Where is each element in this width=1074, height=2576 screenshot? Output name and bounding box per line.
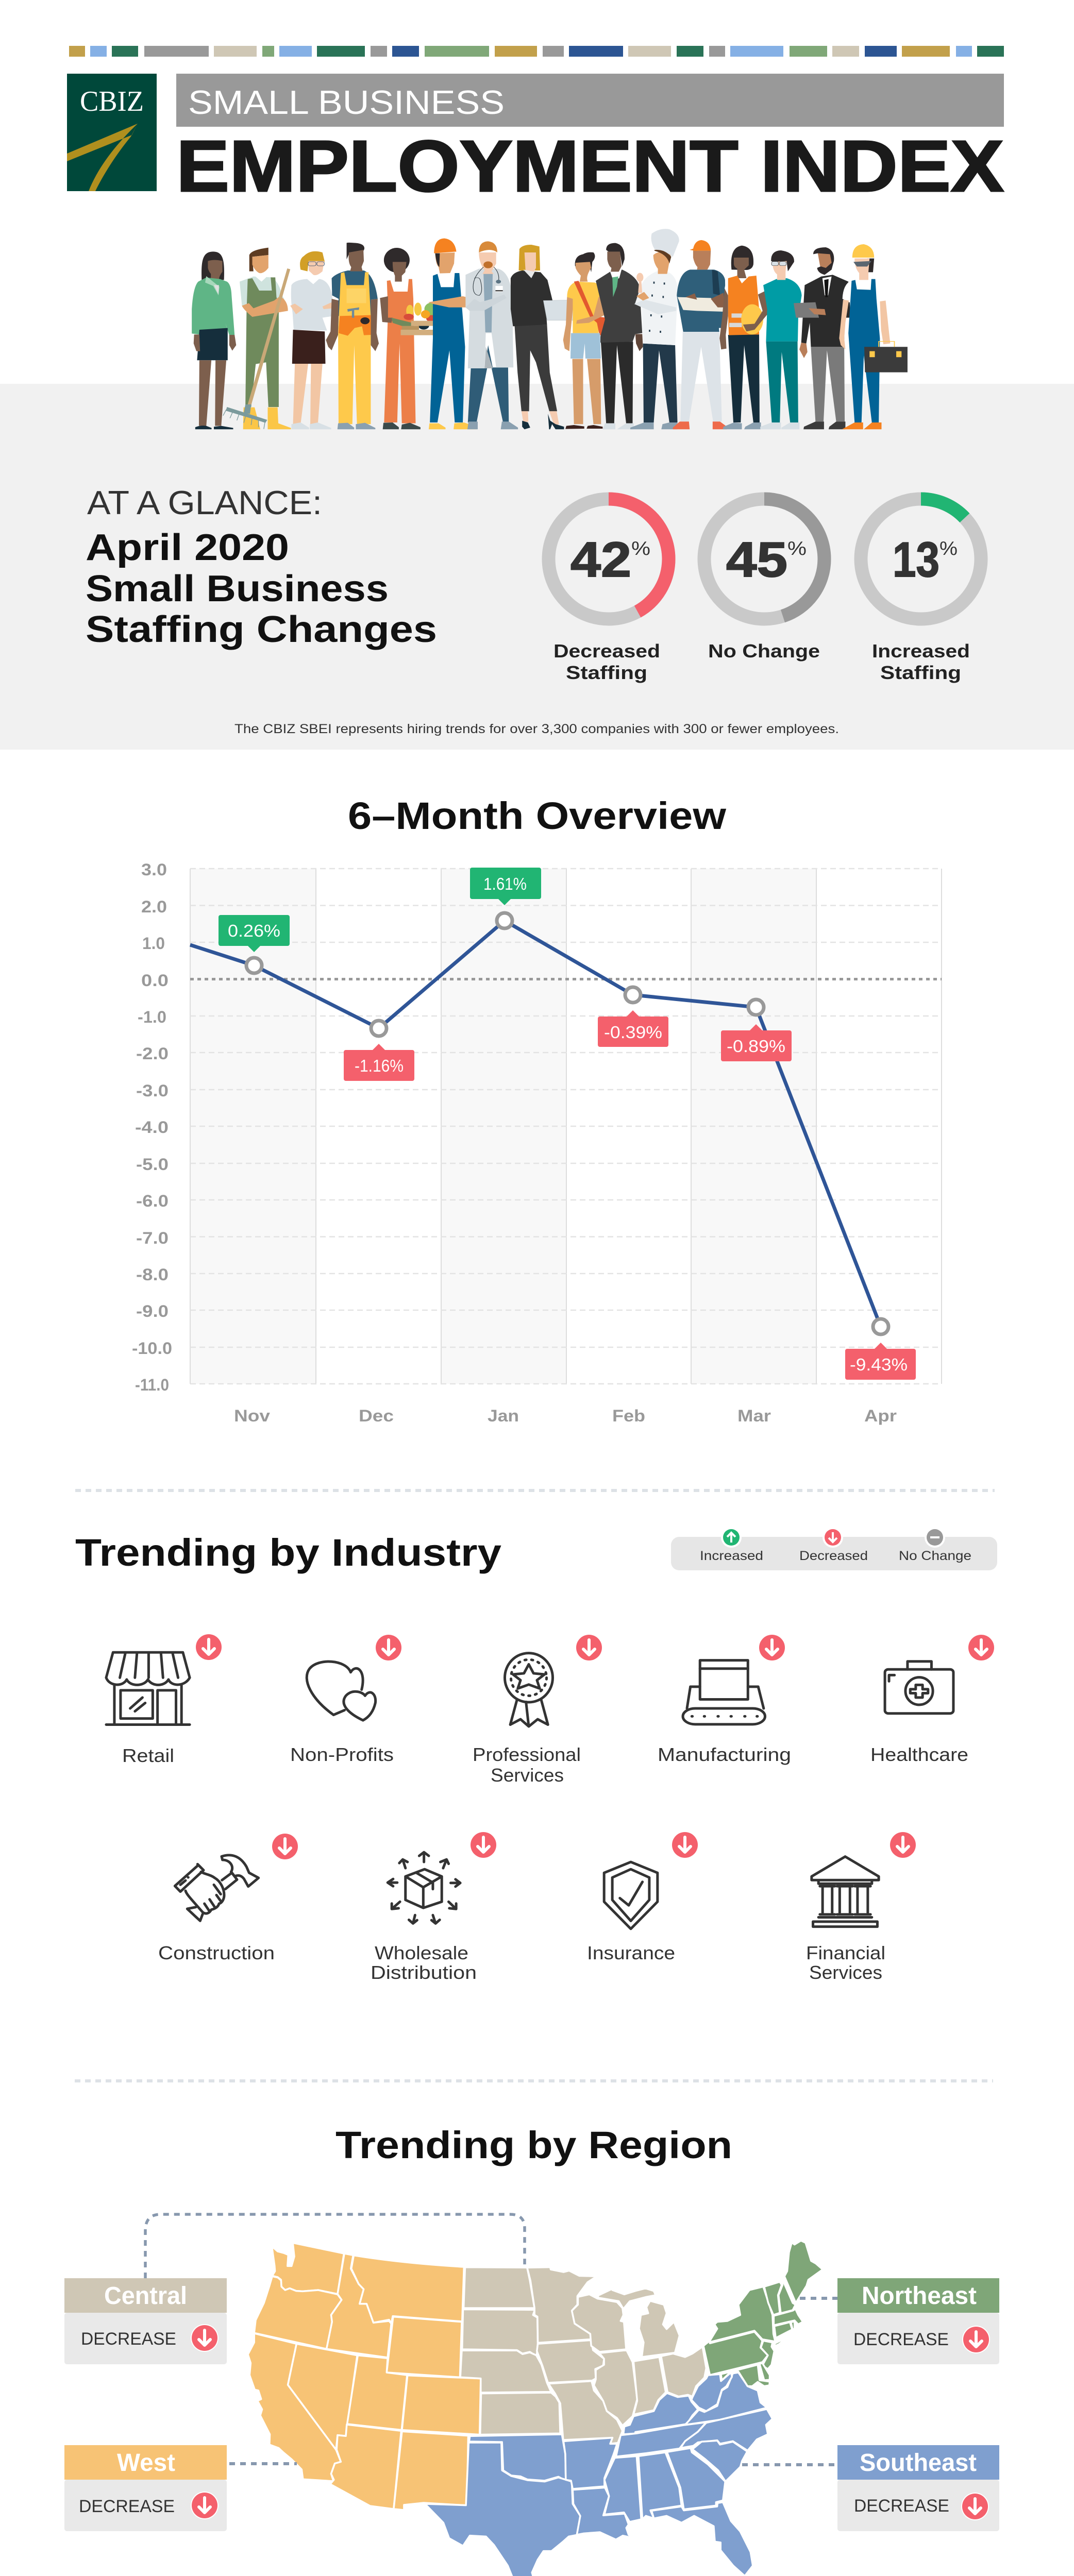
title: employment index: EMPLOYMENT INDEX: [176, 125, 1004, 207]
callout: Dec -1.16%: [344, 1044, 414, 1081]
series line: [190, 921, 881, 1327]
logo: CBIZ: CBIZ: [80, 86, 144, 117]
callout: Dec -1.16%: -1.16%: [355, 1056, 404, 1075]
man suit green tie: [596, 243, 643, 429]
industry: professional services: [473, 1635, 602, 1786]
callout: Feb -0.39%: -0.39%: [604, 1023, 662, 1042]
y axis labels: -4.0: [135, 1118, 169, 1137]
x axis labels: Apr: [864, 1406, 897, 1425]
callout: central: Central: [104, 2282, 187, 2310]
heading: trending by industry: Trending by Industry: [75, 1531, 501, 1574]
donut: 13% increased staffing: 13: [893, 532, 939, 587]
heading: at a glance: April 2020: [86, 527, 289, 568]
footnote: The CBIZ SBEI represents hiring trends for over 3,300 companies with 300 or fewer employees.: [234, 722, 839, 736]
donut: 42% decreased staffing: [548, 499, 669, 683]
top colour strip: [69, 46, 1004, 57]
industry: healthcare: [870, 1635, 994, 1765]
industry: insurance: Insurance: [587, 1942, 675, 1963]
x axis labels: Dec: [359, 1406, 394, 1425]
handyman yellow overalls: [326, 243, 379, 429]
callout: Nov 0.26%: 0.26%: [228, 921, 280, 940]
callout: Jan 1.61%: [470, 868, 541, 905]
donut: 42% decreased staffing: Staffing: [566, 662, 647, 683]
y axis labels: [132, 860, 172, 1394]
legend: Increased: [700, 1549, 763, 1563]
worker with toolbox: [839, 244, 908, 429]
callout: northeast: DECREASE: [853, 2330, 949, 2349]
x axis labels: Nov: [234, 1406, 270, 1425]
illustration: workers group: [192, 229, 908, 429]
industry: financial services: Services: [809, 1962, 882, 1983]
farmer woman orange: [380, 248, 447, 429]
heading: 6-month overview: 6–Month Overview: [348, 794, 726, 837]
west region states: [248, 2243, 481, 2510]
donut: 13% increased staffing: Increased: [872, 640, 970, 662]
donut: 42% decreased staffing: %: [631, 538, 650, 560]
callout: Feb -0.39%: [598, 1010, 668, 1047]
y axis labels: -5.0: [136, 1155, 169, 1174]
industry: financial services: Financial: [806, 1942, 885, 1963]
man blue shirt orange cap: [673, 240, 727, 429]
heading: at a glance: Staffing Changes: [86, 609, 437, 650]
heading: trending by region: Trending by Region: [335, 2124, 732, 2166]
callout: central: DECREASE: [81, 2329, 176, 2349]
industry: non-profits: Non-Profits: [290, 1744, 394, 1765]
industry: manufacturing: [658, 1635, 791, 1765]
donut: 13% increased staffing: Staffing: [880, 662, 961, 683]
donut: 13% increased staffing: [861, 499, 981, 683]
heading: at a glance: [86, 484, 437, 650]
callout: Mar -0.89%: [721, 1024, 792, 1061]
industry: retail: [106, 1634, 222, 1766]
y axis labels: -3.0: [136, 1081, 169, 1100]
industry: retail: Retail: [122, 1745, 174, 1766]
x axis labels: [234, 1406, 897, 1425]
legend: [671, 1527, 997, 1570]
industry: wholesale distribution: Distribution: [371, 1962, 477, 1983]
y axis labels: -11.0: [135, 1376, 169, 1394]
industry: professional services: Professional: [473, 1744, 581, 1765]
x axis labels: Mar: [737, 1406, 771, 1425]
bearded man suit with tablet: [794, 247, 851, 429]
industry: manufacturing: Manufacturing: [658, 1744, 791, 1765]
woman green: [192, 251, 236, 429]
doctor: [465, 241, 518, 429]
legend: Decreased: [799, 1549, 868, 1563]
heading: at a glance: AT A GLANCE:: [87, 484, 322, 521]
line chart: 6-month overview: [132, 860, 942, 1425]
connector: southeast: [742, 2463, 837, 2466]
y axis labels: -1.0: [138, 1008, 166, 1026]
industry: healthcare: Healthcare: [870, 1744, 968, 1765]
callout: west: West: [117, 2449, 175, 2477]
donut: 13% increased staffing: %: [939, 538, 958, 560]
y axis labels: -10.0: [132, 1339, 172, 1358]
connector: northeast: [800, 2297, 837, 2300]
y axis labels: -2.0: [136, 1044, 169, 1063]
donut: 45% no change: 45: [726, 532, 787, 587]
woman with glasses: [290, 251, 333, 429]
y axis labels: 2.0: [141, 897, 167, 916]
legend: No Change: [899, 1549, 971, 1563]
logo: CBIZ: [67, 74, 157, 191]
callout: northeast: Northeast: [862, 2282, 977, 2310]
industry: non-profits: [290, 1635, 401, 1765]
callout: Apr -9.43%: [845, 1343, 916, 1380]
industry: insurance: [587, 1832, 698, 1963]
worker blue overalls hard hat: [426, 239, 480, 429]
donut: 45% no change: %: [787, 538, 807, 560]
woman yellow tee: [563, 252, 608, 429]
callout: Nov 0.26%: [219, 915, 290, 952]
panel: at a glance background: [0, 384, 1074, 750]
callout: Apr -9.43%: -9.43%: [850, 1355, 908, 1374]
industry: financial services: [806, 1832, 916, 1983]
nurse teal: [760, 250, 802, 429]
chef: [630, 229, 679, 429]
callout: southeast: [837, 2445, 999, 2531]
industry: construction: Construction: [158, 1942, 275, 1963]
callout: Mar -0.89%: -0.89%: [727, 1037, 785, 1056]
industry: construction: [158, 1834, 298, 1963]
data points: [246, 913, 888, 1334]
callout: northeast: [837, 2278, 999, 2364]
connector: central: [145, 2214, 525, 2278]
callout: west: [64, 2445, 227, 2531]
farmer with rake: [223, 248, 291, 429]
industry: wholesale distribution: [371, 1832, 496, 1983]
callout: southeast: Southeast: [860, 2449, 977, 2477]
donut: 42% decreased staffing: 42: [570, 532, 631, 587]
southeast region states: [425, 2372, 773, 2576]
central region states: [460, 2262, 706, 2444]
x axis labels: Feb: [612, 1406, 645, 1425]
title banner: small business: [176, 74, 1004, 127]
donut: 42% decreased staffing: Decreased: [553, 640, 660, 662]
map: united states regions: [248, 2241, 823, 2576]
y axis labels: -7.0: [136, 1229, 169, 1247]
businesswoman with tablet: [511, 245, 577, 429]
donut: 45% no change: No Change: [708, 640, 820, 662]
northeast region states: [703, 2241, 823, 2386]
y axis labels: -9.0: [136, 1302, 169, 1320]
donut: 45% no change: [704, 499, 825, 662]
x axis labels: Jan: [488, 1406, 519, 1425]
industry: wholesale distribution: Wholesale: [375, 1942, 468, 1963]
woman orange vest: [719, 246, 772, 429]
y axis labels: -8.0: [136, 1265, 169, 1284]
connector: west: [229, 2462, 297, 2465]
title banner: small business: SMALL BUSINESS: [188, 83, 505, 121]
y axis labels: -6.0: [136, 1192, 169, 1210]
heading: at a glance: Small Business: [86, 568, 389, 609]
y axis labels: 0.0: [141, 971, 169, 990]
callout: Jan 1.61%: 1.61%: [483, 874, 527, 893]
callout: central: [64, 2278, 227, 2364]
industry: professional services: Services: [491, 1765, 564, 1786]
y axis labels: 3.0: [141, 860, 167, 879]
callout: west: DECREASE: [79, 2497, 175, 2516]
y axis labels: 1.0: [142, 934, 165, 953]
callout: southeast: DECREASE: [854, 2496, 949, 2516]
